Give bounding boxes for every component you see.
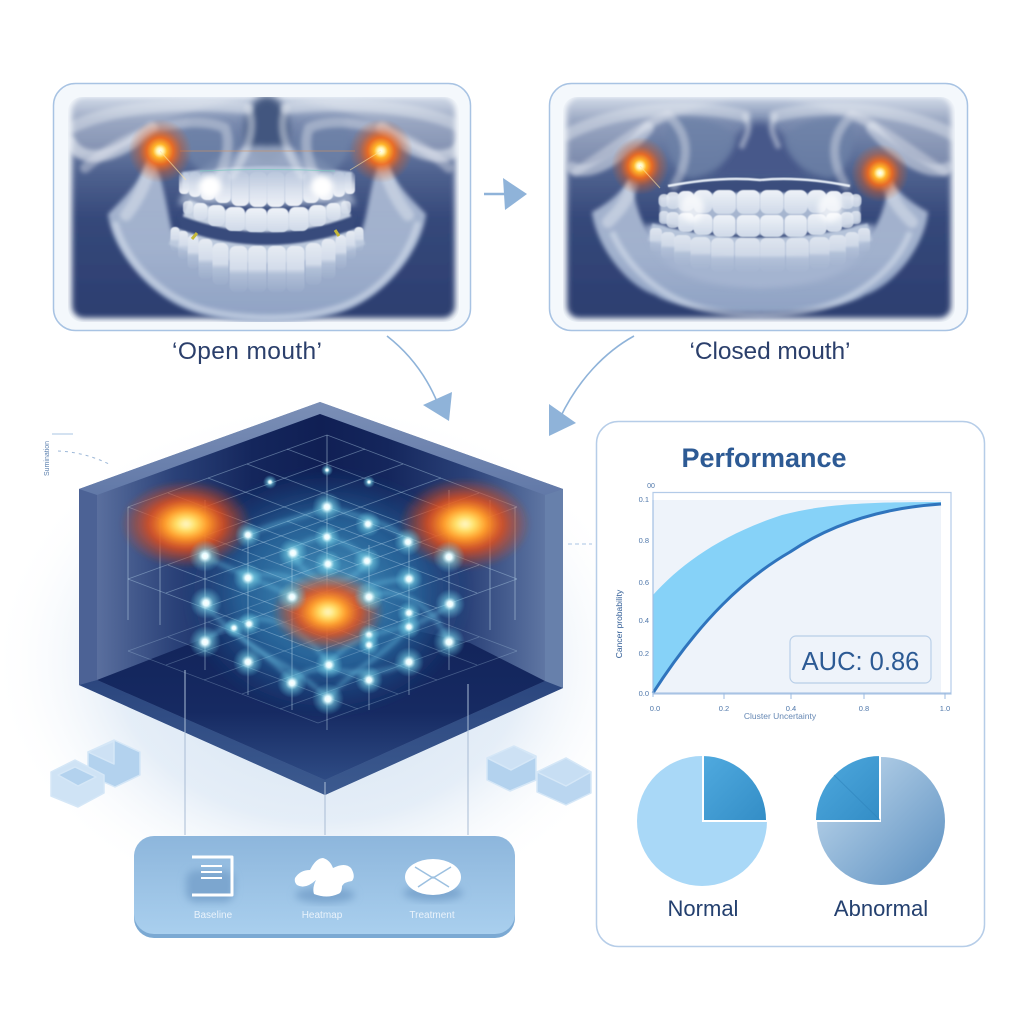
x axis ticks: 0.8	[859, 704, 869, 713]
AUC area	[653, 502, 941, 693]
cube floor	[97, 610, 545, 780]
hot spot left	[128, 119, 192, 183]
module labels: Heatmap	[302, 910, 343, 921]
lower bone under teeth	[645, 225, 875, 288]
small side annotation left	[44, 434, 111, 476]
curved arrow: closed mouth to cube	[549, 336, 634, 436]
nasal cavity	[245, 96, 289, 164]
y axis ticks: 0.2	[639, 649, 649, 658]
neural network glow	[200, 478, 452, 704]
module labels: Baseline	[194, 910, 233, 921]
mandible	[108, 152, 426, 322]
left inner wall	[97, 414, 320, 680]
skull and teeth, both sides	[566, 100, 954, 272]
ROC chart	[614, 483, 951, 721]
y axis ticks: 0.4	[639, 616, 649, 625]
ROC chart: 00	[647, 483, 655, 490]
mandible	[592, 178, 928, 312]
small cubes right	[487, 746, 591, 805]
hot spot closed right	[851, 144, 909, 202]
upper jaw glow	[178, 146, 356, 205]
x axis ticks: 1.0	[940, 704, 950, 713]
skull and teeth, both sides	[70, 100, 464, 292]
orange heat spots	[120, 478, 531, 652]
ROC curve	[653, 504, 941, 693]
module labels: Treatment	[409, 910, 455, 921]
3D voxel cube	[79, 402, 563, 795]
x axis ticks: 0.4	[786, 704, 796, 713]
arrow between x-rays	[484, 178, 527, 210]
right inner wall	[320, 414, 545, 681]
caption: open mouth: ‘Open mouth’	[172, 338, 322, 365]
hot spot right	[349, 119, 413, 183]
cube outer frame	[79, 402, 563, 795]
background glow behind cube	[0, 400, 650, 920]
small side annotation left: Sumination	[44, 441, 51, 476]
x axis ticks: 0.2	[719, 704, 729, 713]
AUC box	[790, 636, 931, 683]
hot spot closed left	[611, 137, 669, 195]
panel: performance	[596, 422, 984, 946]
vertical lattice lines	[128, 435, 515, 730]
y axis ticks: 0.6	[639, 578, 649, 587]
x axis title: Cluster Uncertainty	[744, 711, 817, 721]
panel: module bar	[134, 836, 515, 938]
x axis ticks: 0.0	[650, 704, 660, 713]
panel: closed mouth X-ray	[550, 84, 968, 330]
small cubes left	[51, 740, 140, 807]
y axis ticks: 0.8	[639, 536, 649, 545]
small connector right of cube	[568, 543, 592, 545]
icon: cell	[403, 859, 463, 901]
connector lines to module bar	[185, 670, 468, 835]
voxel grid planes	[128, 435, 517, 723]
pie chart: abnormal: Abnormal	[834, 896, 928, 921]
y axis ticks: 0.0	[639, 689, 649, 698]
central maxilla	[720, 118, 800, 174]
network wisps	[205, 507, 449, 699]
y axis title: Cancer probability	[614, 589, 624, 658]
heading: Performance	[681, 443, 847, 473]
pie chart: abnormal	[815, 755, 945, 921]
icon: blob	[295, 858, 355, 903]
y axis ticks	[639, 495, 649, 698]
curved arrow: open mouth to cube	[387, 336, 452, 421]
mouth gap	[178, 215, 356, 248]
gum line	[668, 179, 850, 186]
icon: document	[186, 857, 234, 902]
module labels	[194, 910, 455, 921]
tooth backing	[172, 166, 362, 254]
x axis ticks	[650, 704, 950, 713]
caption: closed mouth: ‘Closed mouth’	[690, 338, 850, 365]
panel: open mouth X-ray	[54, 84, 470, 330]
tooth backing	[650, 192, 870, 247]
pie chart: normal: Normal	[668, 896, 738, 921]
dark band above teeth	[665, 178, 855, 240]
glowing nodes	[189, 464, 465, 715]
y axis ticks: 0.1	[639, 495, 649, 504]
AUC box: AUC: 0.86	[802, 648, 919, 676]
pie chart: normal	[637, 755, 767, 921]
